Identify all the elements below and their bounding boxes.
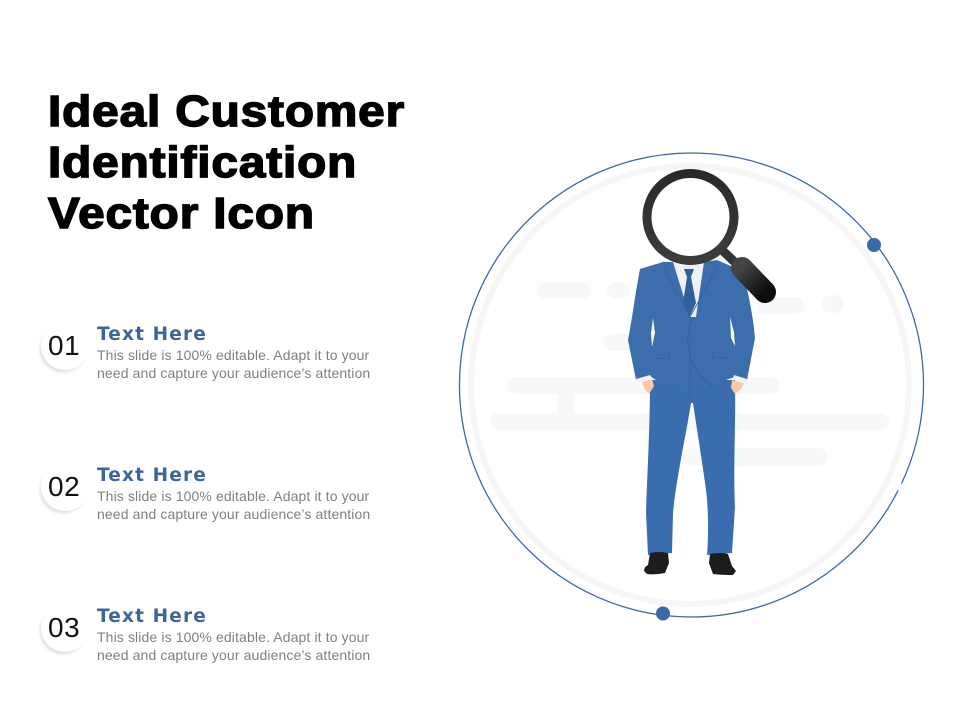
jacket lapels and pocket lines (653, 266, 730, 400)
accent dots (656, 238, 881, 620)
shoes (644, 552, 736, 575)
item heading 02: Text Here (97, 465, 207, 486)
magnifier neck (722, 250, 742, 269)
item text 01 (97, 347, 370, 381)
cuffs (636, 375, 747, 383)
title: Ideal Customer (48, 87, 405, 136)
number 01: 01 (48, 330, 80, 361)
magnifying glass (647, 174, 765, 292)
inner soft ring (471, 166, 909, 604)
outer thin circle (379, 73, 960, 697)
item text 02: This slide is 100% editable. Adapt it to your (97, 488, 369, 504)
arm gap slits (651, 317, 735, 347)
title: Identification (48, 138, 357, 187)
item text 01: This slide is 100% editable. Adapt it to your (97, 347, 369, 363)
title: Vector Icon (48, 189, 315, 238)
jacket (628, 260, 755, 389)
magnifier handle (742, 268, 765, 292)
list item 02 (39, 465, 370, 522)
list item 03 (39, 606, 370, 663)
number badge 02 (41, 463, 89, 511)
number badge 03 (41, 604, 89, 652)
item text 02 (97, 488, 370, 522)
number 02: 02 (48, 471, 80, 502)
item heading 03: Text Here (97, 606, 207, 627)
tie (683, 269, 696, 316)
background cloud pills (490, 282, 889, 466)
item text 01: need and capture your audience’s attention (97, 365, 370, 381)
trousers (646, 380, 735, 555)
item heading 01: Text Here (97, 324, 207, 345)
item text 02: need and capture your audience’s attention (97, 506, 370, 522)
item text 03: This slide is 100% editable. Adapt it to your (97, 629, 369, 645)
list item 01 (39, 324, 370, 381)
hands (642, 379, 744, 394)
item text 03: need and capture your audience’s attention (97, 647, 370, 663)
businessman figure (628, 260, 755, 575)
number badge 01 (41, 322, 89, 370)
item text 03 (97, 629, 370, 663)
title (47, 87, 405, 238)
magnifier lens (647, 174, 734, 260)
number 03: 03 (48, 612, 80, 643)
shirt (672, 260, 705, 318)
